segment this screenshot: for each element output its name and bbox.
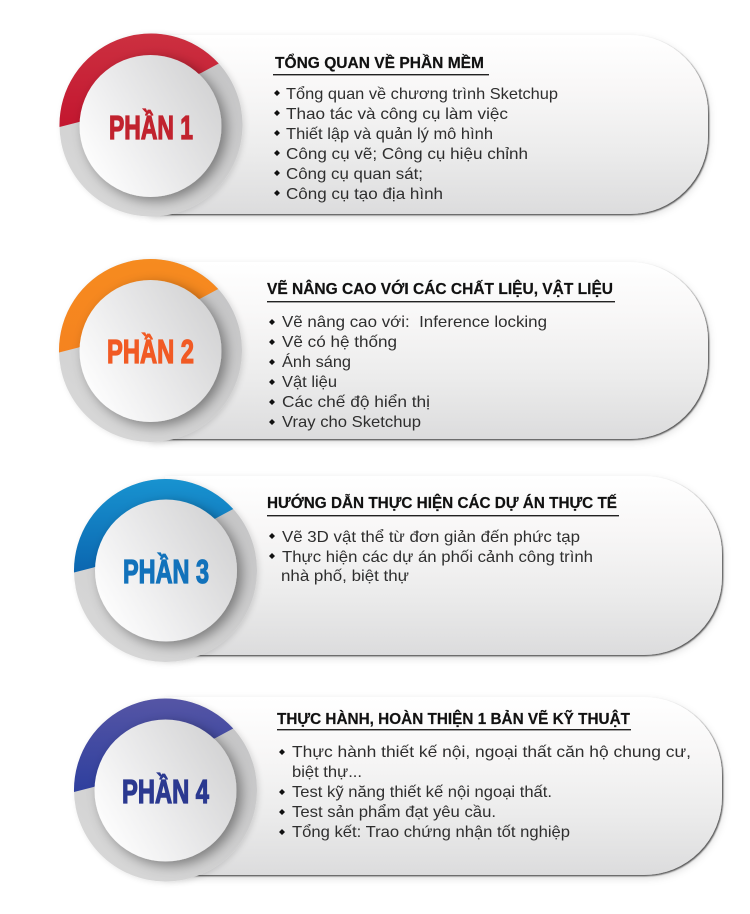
bullet list: Vray cho Sketchup [282, 414, 421, 431]
bullet list [269, 314, 547, 431]
bullet list: Thực hành thiết kế nội, ngoại thất căn hộ chung cư, [292, 744, 691, 761]
bullet list: nhà phố, biệt thự [281, 568, 409, 585]
bullet list: Các chế độ hiển thị [282, 393, 430, 411]
heading: HƯỚNG DẪN THỰC HIỆN CÁC DỰ ÁN THỰC TẾ [267, 494, 617, 512]
bullet list: Tổng kết: Trao chứng nhận tốt nghiệp [292, 823, 570, 841]
heading: VẼ NÂNG CAO VỚI CÁC CHẤT LIỆU, VẬT LIỆU [267, 280, 613, 298]
pill background [165, 697, 722, 875]
panel: phần 2 [59, 259, 708, 442]
bullet list: Test kỹ năng thiết kế nội ngoại thất. [292, 784, 552, 801]
bullet list: Tổng quan về chương trình Sketchup [286, 85, 558, 103]
bullet list: Thao tác và công cụ làm việc [286, 106, 508, 123]
heading: THỰC HÀNH, HOÀN THIỆN 1 BẢN VẼ KỸ THUẬT [277, 710, 631, 728]
bullet list: Công cụ vẽ; Công cụ hiệu chỉnh [286, 146, 528, 163]
ring badge [74, 698, 257, 882]
bullet list: Test sản phẩm đạt yêu cầu. [292, 803, 496, 821]
ring badge [74, 479, 257, 662]
bullet list [279, 744, 691, 841]
bullet list: Công cụ quan sát; [286, 166, 423, 183]
label: PHẦN 4 [122, 773, 209, 810]
label: PHẦN 3 [123, 553, 209, 590]
bullet list: Thiết lập và quản lý mô hình [286, 126, 493, 143]
bullet list: Vật liệu [282, 374, 337, 391]
panel: phần 1 [59, 34, 708, 216]
label: PHẦN 1 [109, 109, 193, 146]
bullet list: Công cụ tạo địa hình [286, 186, 443, 203]
bullet list [274, 85, 558, 203]
bullet list: Vẽ có hệ thống [282, 334, 397, 351]
ring badge [59, 34, 242, 216]
bullet list: biệt thự... [292, 764, 362, 781]
heading: TỔNG QUAN VỀ PHẦN MỀM [275, 54, 484, 72]
panel: phần 4 [74, 697, 722, 882]
pill background [165, 476, 722, 655]
bullet list: Thực hiện các dự án phối cảnh công trình [282, 549, 593, 566]
pill background [150, 35, 708, 214]
panel: phần 3 [74, 476, 722, 662]
label: PHẦN 2 [107, 333, 194, 370]
bullet list: Ánh sáng [282, 352, 351, 371]
pill background [150, 262, 708, 439]
bullet list: Vẽ nâng cao với: Inference locking [282, 314, 547, 331]
ring badge [59, 259, 242, 442]
bullet list [269, 528, 593, 585]
bullet list: Vẽ 3D vật thể từ đơn giản đến phức tạp [282, 528, 580, 546]
